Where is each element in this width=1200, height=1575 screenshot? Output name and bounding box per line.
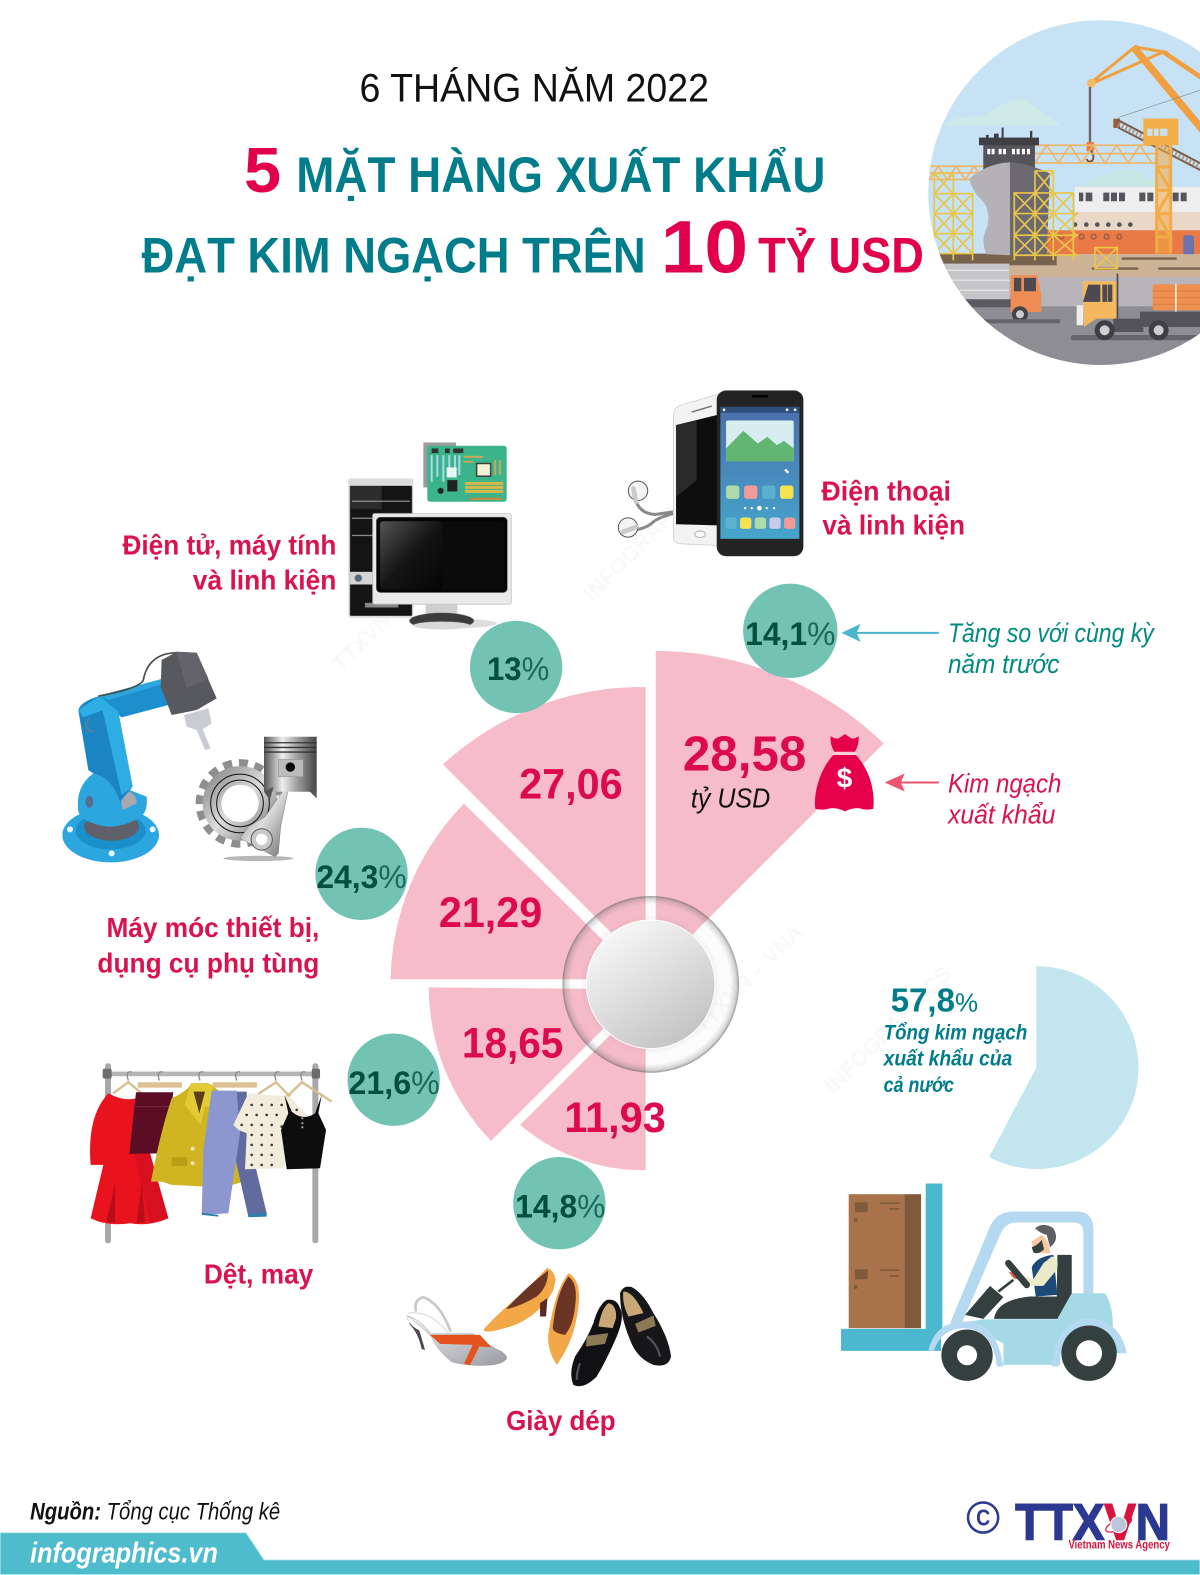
arrow: growth legend xyxy=(842,624,939,642)
value: 18,65: 18,65 xyxy=(462,1020,563,1067)
yellow blazer xyxy=(151,1083,243,1187)
label: electronics: và linh kiện xyxy=(193,565,336,596)
illustration: smartphones and earphones xyxy=(618,390,803,556)
stat: 57.8%: cả nước xyxy=(884,1074,954,1097)
badge: textile growth xyxy=(347,1034,440,1126)
chart: radial export sectors xyxy=(391,651,884,1170)
chart: 57.8% share pie xyxy=(989,966,1138,1169)
truss horizontal xyxy=(929,145,1157,180)
value: 21,29: 21,29 xyxy=(439,889,542,936)
tower crane xyxy=(1143,119,1178,145)
badge: footwear growth xyxy=(513,1157,606,1249)
watermarks: TTXVN – VNA xyxy=(327,557,446,677)
scaffolds xyxy=(934,171,1117,269)
illustration: gear and piston xyxy=(201,737,317,861)
value: 27,06: 27,06 xyxy=(519,761,623,808)
icon: money bag: $ xyxy=(837,763,853,794)
monitor xyxy=(417,619,497,628)
brown jib xyxy=(1113,119,1120,128)
label: machinery xyxy=(97,912,319,978)
orange truck xyxy=(943,264,1009,300)
skirt xyxy=(129,1092,173,1154)
yellow truck xyxy=(1083,281,1117,327)
circuit board xyxy=(423,442,507,502)
watermarks xyxy=(327,469,957,1098)
stat: 57.8%: Tổng kim ngạch xyxy=(884,1022,1027,1045)
legend: growth: Tăng so với cùng kỳ xyxy=(948,617,1155,648)
black top xyxy=(281,1095,326,1169)
label: phones xyxy=(821,475,965,540)
buildings xyxy=(1075,187,1200,212)
label: textiles: Dệt, may xyxy=(204,1259,314,1290)
label: electronics: Điện tử, máy tính xyxy=(123,530,336,561)
front phone xyxy=(717,390,803,556)
title: main heading: MẶT HÀNG XUẤT KHẨU xyxy=(296,147,825,203)
ship xyxy=(983,144,1035,170)
earphones xyxy=(618,481,673,537)
label: phones: và linh kiện xyxy=(822,509,965,540)
value: 11,93: 11,93 xyxy=(564,1094,666,1141)
value: 28,58 billion USD xyxy=(683,726,806,814)
sector: footwear xyxy=(520,999,646,1170)
badge: machinery growth xyxy=(315,828,408,920)
badge: textile growth: 21,6% xyxy=(348,1065,440,1101)
badge: machinery growth: 24,3% xyxy=(316,859,407,895)
watermarks: TTXVN – VNA xyxy=(689,919,808,1038)
legend: growth xyxy=(948,617,1155,679)
orange pump side view xyxy=(483,1268,556,1332)
cab frame xyxy=(950,1212,1093,1323)
title: period: 6 THÁNG NĂM 2022 xyxy=(359,66,709,111)
label: footwear: Giày dép xyxy=(506,1405,616,1436)
watermarks: INFOGRAPHICS xyxy=(819,961,957,1098)
sector: electronics xyxy=(443,687,646,967)
jeans xyxy=(233,1092,267,1217)
illustration: port and factory circle xyxy=(928,20,1200,365)
stat: 57.8% xyxy=(883,982,1027,1097)
badge: phones growth xyxy=(743,584,837,678)
polka top xyxy=(233,1093,308,1169)
badge: electronics growth: 13% xyxy=(487,651,549,687)
big crane xyxy=(1092,44,1200,132)
badge: electronics growth xyxy=(470,621,562,713)
illustration: forklift xyxy=(841,1184,1127,1381)
illustration: clothes rack xyxy=(90,1063,332,1243)
body xyxy=(960,1293,1120,1365)
white phone xyxy=(673,393,721,545)
label: machinery: dụng cụ phụ tùng xyxy=(97,947,319,978)
title: main heading: TỶ USD xyxy=(758,227,924,283)
footer bar xyxy=(0,1533,1200,1575)
sector: phones xyxy=(656,651,884,971)
watermarks: INFOGRAPHICS xyxy=(578,469,716,606)
driver xyxy=(1032,1255,1057,1297)
legend: export value: xuất khẩu xyxy=(946,799,1055,830)
centre ring xyxy=(562,896,739,1073)
sector: machinery xyxy=(391,804,643,979)
value: 28,58 billion USD: 28,58 xyxy=(683,726,806,781)
label: machinery: Máy móc thiết bị, xyxy=(106,912,319,943)
icon: money bag xyxy=(815,734,874,811)
label: phones: Điện thoại xyxy=(821,475,951,506)
source: Nguồn: Tổng cục Thống kê xyxy=(30,1499,280,1526)
legend: growth: năm trước xyxy=(948,648,1060,679)
orange pump top view xyxy=(548,1273,579,1365)
stat: 57.8%: 57,8% xyxy=(891,982,978,1019)
badge: phones growth: 14,1% xyxy=(745,616,835,652)
black loafers xyxy=(571,1287,671,1386)
arrow: export value legend xyxy=(885,773,939,792)
tower xyxy=(348,478,413,618)
logo: TTXVN: Vietnam News Agency xyxy=(1068,1538,1170,1552)
stat: 57.8%: xuất khẩu của xyxy=(883,1048,1012,1071)
website: infographics.vn xyxy=(30,1538,218,1570)
sector: textiles xyxy=(429,987,643,1141)
value: 28,58 billion USD: tỷ USD xyxy=(691,783,770,814)
slingback heel xyxy=(407,1297,507,1365)
illustration: computer and circuit board xyxy=(348,442,511,629)
wheels xyxy=(941,1330,993,1381)
logo: TTXVN: TTXVN xyxy=(1015,1494,1170,1551)
title: main heading xyxy=(142,134,924,288)
illustration: shoes xyxy=(407,1268,671,1386)
badge: footwear growth: 14,8% xyxy=(515,1188,606,1224)
ground xyxy=(927,254,1200,278)
logo: TTXVN: C xyxy=(976,1505,990,1531)
seat xyxy=(994,1255,1072,1319)
title: main heading: 10 xyxy=(661,205,748,288)
title: main heading: ĐẠT KIM NGẠCH TRÊN xyxy=(142,227,646,283)
legend: export value: Kim ngạch xyxy=(948,768,1061,799)
legend: export value xyxy=(946,768,1061,830)
label: electronics xyxy=(123,530,336,596)
title: main heading: 5 xyxy=(244,134,281,206)
red dress xyxy=(90,1093,168,1224)
illustration: robot arm xyxy=(62,652,217,862)
